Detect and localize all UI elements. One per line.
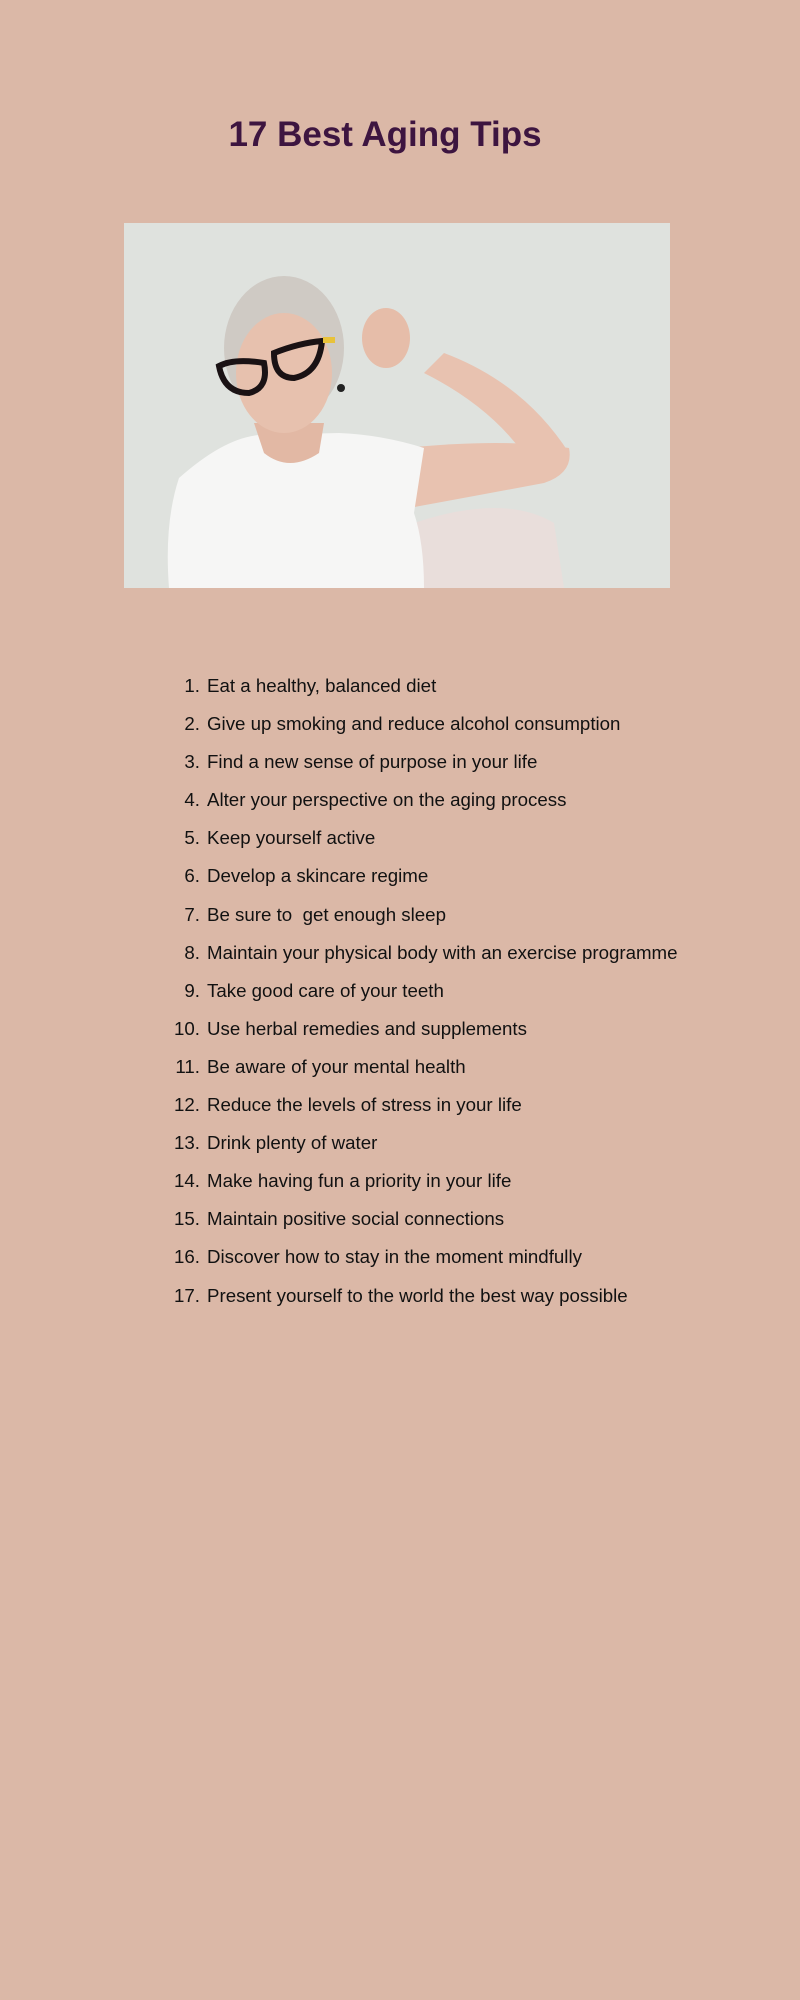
tip 16: 16. (174, 1246, 200, 1267)
tip 2: Give up smoking and reduce alcohol consumption (207, 713, 620, 734)
pants (414, 508, 564, 588)
tip 3: 3. (184, 751, 200, 772)
tip 16: Discover how to stay in the moment mindfully (207, 1246, 582, 1267)
glasses (219, 341, 322, 393)
tip 5: Keep yourself active (207, 827, 375, 848)
tip 13: 13. (174, 1132, 200, 1153)
tip 15: 15. (174, 1208, 200, 1229)
tip 12: Reduce the levels of stress in your life (207, 1094, 522, 1115)
tip 10: 10. (174, 1018, 200, 1039)
face (236, 313, 332, 433)
tip 10: Use herbal remedies and supplements (207, 1018, 527, 1039)
tip 14: Make having fun a priority in your life (207, 1170, 511, 1191)
tip 4: 4. (184, 789, 200, 810)
arm (404, 443, 570, 508)
tip 11: Be aware of your mental health (207, 1056, 466, 1077)
tip 7: 7. (184, 904, 200, 925)
tip 11: 11. (175, 1056, 200, 1077)
tip 9: 9. (184, 980, 200, 1001)
shirt (168, 433, 424, 588)
tip 1: Eat a healthy, balanced diet (207, 675, 436, 696)
tip 6: 6. (184, 865, 200, 886)
tip 8: 8. (184, 942, 200, 963)
title: 17 Best Aging Tips (228, 115, 542, 154)
hair (224, 276, 344, 420)
tip 6: Develop a skincare regime (207, 865, 428, 886)
tip 8: Maintain your physical body with an exercise programme (207, 942, 678, 963)
tip 9: Take good care of your teeth (207, 980, 444, 1001)
tip 13: Drink plenty of water (207, 1132, 377, 1153)
photo: smiling woman with glasses (124, 223, 670, 588)
tip 3: Find a new sense of purpose in your life (207, 751, 537, 772)
tip 5: 5. (184, 827, 200, 848)
hand (362, 308, 410, 368)
list of tips (174, 675, 678, 1306)
tip 1: 1. (184, 675, 200, 696)
tip 14: 14. (174, 1170, 200, 1191)
tip 4: Alter your perspective on the aging process (207, 789, 566, 810)
tip 17: 17. (174, 1284, 200, 1306)
earring (337, 384, 345, 392)
tip 15: Maintain positive social connections (207, 1208, 504, 1229)
tip 17: Present yourself to the world the best way possible (207, 1284, 628, 1306)
tip 7: Be sure to get enough sleep (207, 904, 446, 925)
tip 12: 12. (174, 1094, 200, 1115)
tip 2: 2. (184, 713, 200, 734)
neck (254, 423, 324, 463)
